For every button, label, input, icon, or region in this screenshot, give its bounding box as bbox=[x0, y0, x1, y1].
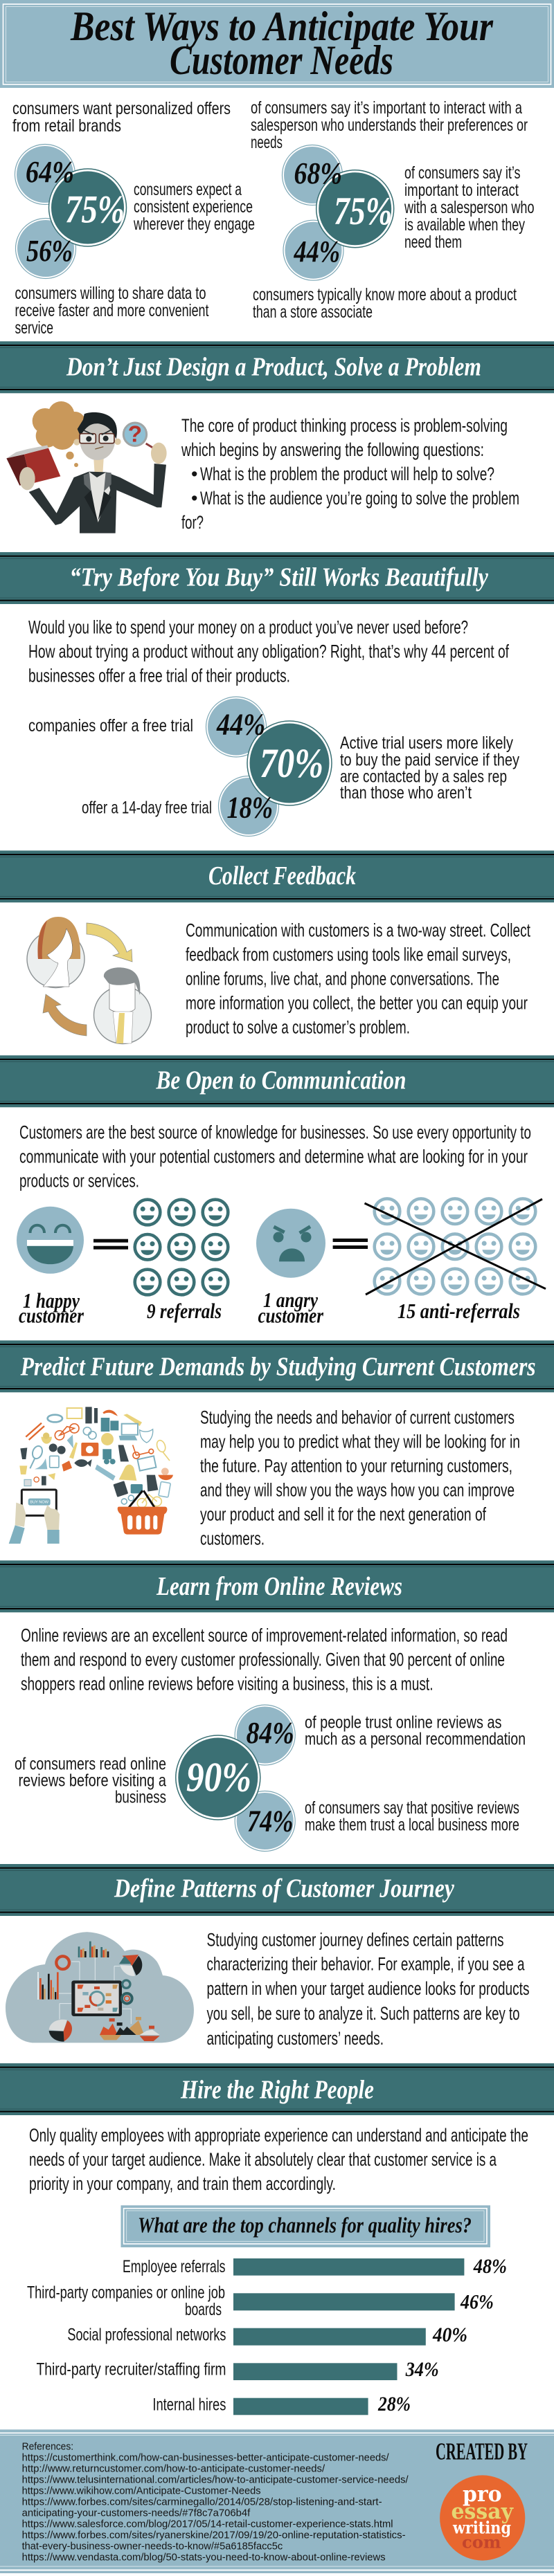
icon: happy customer face bbox=[17, 1207, 84, 1274]
caption: 56 percent bbox=[15, 284, 209, 338]
stat circle: 68 percent bbox=[283, 145, 342, 205]
section banner: online reviews: Learn from Online Reviews bbox=[156, 1572, 402, 1601]
figure: 84 percent: 84% bbox=[247, 1716, 294, 1750]
label: 1 happy customer bbox=[19, 1288, 84, 1328]
hands and sleeves bbox=[9, 1503, 60, 1544]
panel: retail statistics left bbox=[12, 99, 255, 338]
label: 15 anti-referrals: 15 anti-referrals bbox=[397, 1299, 520, 1323]
figure: 18 percent: 18% bbox=[227, 791, 273, 825]
references list: https://www.vendasta.com/blog/50-stats-you-need-to-know-about-online-reviews bbox=[22, 2552, 386, 2564]
glasses and face bbox=[80, 430, 114, 449]
bar: third-party companies 46 percent: 46% bbox=[460, 2291, 494, 2314]
text block: communication: products or services. bbox=[19, 1171, 139, 1191]
caption: 90 percent: reviews before visiting a bbox=[18, 1771, 166, 1791]
text block: free trial intro bbox=[28, 617, 509, 686]
ears bbox=[73, 439, 121, 446]
pie chart right bbox=[119, 1955, 142, 1976]
connector lines bbox=[59, 1957, 131, 2024]
figure: 75 percent: 75% bbox=[65, 188, 125, 232]
text block: product thinking: for? bbox=[181, 512, 204, 533]
logo: pro essay writing com: pro bbox=[463, 2482, 501, 2507]
caption: 70 percent: than those who aren’t bbox=[340, 783, 472, 803]
bar: third-party companies 46 percent bbox=[27, 2283, 494, 2319]
section banner: open to communication bbox=[0, 1055, 554, 1107]
caption: 75 percent: consistent experience bbox=[134, 197, 253, 217]
references list: https://www.forbes.com/sites/ryanerskine/2017/09/19/20-online-reputation-statistics- bbox=[22, 2530, 406, 2541]
text block: customer journey bbox=[206, 1929, 529, 2049]
bar: social networks 40 percent: Social professional networks bbox=[67, 2326, 226, 2345]
stat circle: 56 percent bbox=[15, 219, 76, 278]
caption: 68 percent bbox=[251, 98, 528, 152]
references list: https://customerthink.com/how-can-businesses-better-anticipate-customer-needs/ bbox=[22, 2452, 389, 2464]
caption: 70 percent: are contacted by a sales rep bbox=[340, 767, 507, 787]
right hand bbox=[151, 443, 167, 464]
bar: employee referrals 48 percent bbox=[123, 2255, 507, 2278]
stat circle: 75 percent bbox=[316, 170, 394, 248]
magnifier bbox=[123, 421, 153, 448]
icon: equals sign bbox=[93, 1239, 128, 1250]
section banner: customer journey: Define Patterns of Customer Journey bbox=[114, 1874, 454, 1903]
caption: 75 percent bbox=[404, 163, 535, 252]
stat circle: 84 percent bbox=[235, 1705, 295, 1765]
text block: customer journey: anticipating customers’ needs. bbox=[206, 2028, 384, 2049]
caption: 44 percent: than a store associate bbox=[253, 302, 373, 322]
bar: recruiter 34 percent bbox=[36, 2358, 439, 2381]
section banner: hire the right people: Hire the Right People bbox=[180, 2075, 374, 2104]
icon: angry customer face bbox=[256, 1209, 325, 1278]
label: 9 referrals: 9 referrals bbox=[147, 1299, 222, 1323]
text block: free trial intro: businesses offer a free trial of their products. bbox=[28, 666, 290, 686]
panel: retail statistics right bbox=[251, 98, 535, 322]
section banner: open to communication: Be Open to Communication bbox=[156, 1066, 406, 1095]
label: 1 happy customer: customer bbox=[19, 1304, 84, 1328]
caption: 84 percent bbox=[305, 1713, 526, 1749]
neck bbox=[93, 455, 104, 474]
icon: fifteen crossed-out smiley faces bbox=[364, 1198, 546, 1295]
donut chart bbox=[56, 1956, 69, 1969]
figure: 44 percent: 44% bbox=[294, 235, 340, 268]
section banner: collect feedback: Collect Feedback bbox=[208, 861, 356, 890]
figure: 64 percent: 64% bbox=[26, 155, 74, 189]
stat circle: 90 percent bbox=[176, 1735, 260, 1820]
arc of product icons bbox=[19, 1407, 173, 1508]
references list: https://www.forbes.com/sites/carminegallo/2014/05/28/stop-listening-and-start- bbox=[22, 2496, 382, 2508]
references list: anticipating-your-customers-needs/#7f8c7a706b4f bbox=[22, 2508, 251, 2519]
caption: 68 percent: needs bbox=[251, 133, 283, 152]
thought cloud bbox=[33, 401, 85, 467]
figure: 75 percent: 75% bbox=[334, 190, 392, 233]
orange arrow bbox=[43, 994, 87, 1036]
caption: 64 percent bbox=[12, 99, 231, 136]
stat circle: 70 percent bbox=[247, 721, 332, 805]
section banner: hire the right people bbox=[0, 2063, 554, 2115]
figure: 44 percent: 44% bbox=[216, 708, 265, 742]
label: 1 happy customer: 1 happy bbox=[23, 1288, 80, 1313]
bottom pie chart bbox=[49, 2020, 72, 2042]
caption: 75 percent: important to interact bbox=[404, 181, 519, 200]
section banner: solve a problem: Don’t Just Design a Product, Solve a Problem bbox=[66, 352, 481, 381]
section banner: customer journey bbox=[0, 1864, 554, 1916]
top bar chart bbox=[78, 1942, 109, 1957]
figure: 74 percent: 74% bbox=[247, 1805, 294, 1838]
figure: 70 percent: 70% bbox=[260, 740, 323, 786]
text block: hiring bbox=[29, 2125, 528, 2194]
book bbox=[6, 445, 60, 486]
label: 1 angry customer: customer bbox=[258, 1304, 324, 1328]
logo: pro essay writing com: writing bbox=[452, 2518, 511, 2538]
header banner bbox=[0, 0, 554, 88]
bar: recruiter 34 percent: 34% bbox=[405, 2358, 439, 2381]
title: Best Ways to Anticipate Your bbox=[70, 3, 494, 49]
caption: 90 percent bbox=[15, 1754, 166, 1807]
icon: analytics cloud with tablet and charts bbox=[6, 1932, 194, 2043]
text block: hiring: priority in your company, and train them accordingly. bbox=[29, 2173, 336, 2194]
text block: communication bbox=[19, 1122, 531, 1191]
references list: References: bbox=[22, 2441, 73, 2453]
references list: https://www.telusinternational.com/articles/how-to-anticipate-customer-service-needs/ bbox=[22, 2474, 409, 2486]
caption: 18 percent: offer a 14-day free trial bbox=[82, 798, 212, 818]
chart heading box bbox=[120, 2205, 490, 2247]
gears bbox=[122, 1980, 132, 2004]
section banner: collect feedback bbox=[0, 850, 554, 902]
title bbox=[70, 3, 494, 83]
section banner: online reviews bbox=[0, 1560, 554, 1612]
tablet with buy now button: BUY NOW bbox=[30, 1501, 49, 1505]
section banner: try before you buy: “Try Before You Buy” Still Works Beautifully bbox=[69, 563, 488, 592]
jacket bbox=[29, 464, 166, 533]
bar: internal hires 28 percent bbox=[152, 2393, 411, 2415]
caption: 56 percent: receive faster and more convenient bbox=[15, 301, 209, 320]
icon: nine referral smiley faces bbox=[135, 1200, 228, 1295]
woman bbox=[27, 917, 84, 988]
stat circle: 18 percent bbox=[219, 776, 278, 836]
panel: free trial statistics bbox=[28, 697, 519, 836]
icon: equals sign bbox=[333, 1239, 368, 1249]
yellow arrow bbox=[87, 923, 132, 962]
text block: predict demands bbox=[200, 1407, 520, 1549]
bar: employee referrals 48 percent: 48% bbox=[473, 2255, 507, 2278]
stat circle: 44 percent bbox=[206, 697, 266, 757]
figure: 68 percent: 68% bbox=[294, 156, 342, 190]
text block: collect feedback: product to solve a customer’s problem. bbox=[186, 1016, 410, 1037]
logo: pro essay writing com: com bbox=[462, 2532, 501, 2552]
text block: predict demands: customers. bbox=[200, 1528, 265, 1549]
references list: https://www.wikihow.com/Anticipate-Customer-Needs bbox=[22, 2485, 261, 2497]
shopping basket bbox=[118, 1490, 167, 1535]
bar: social networks 40 percent bbox=[67, 2323, 467, 2346]
mountain chart bbox=[100, 2017, 160, 2041]
logo: pro essay writing com bbox=[440, 2475, 525, 2561]
left bar chart bbox=[37, 1972, 59, 2000]
references list: https://www.salesforce.com/blog/2017/05/14-retail-customer-experience-stats.html bbox=[22, 2519, 393, 2530]
chart heading box: What are the top channels for quality hires? bbox=[138, 2213, 472, 2238]
references list: http://www.returncustomer.com/how-to-anticipate-customer-needs/ bbox=[22, 2463, 325, 2475]
figure: 56 percent: 56% bbox=[26, 234, 73, 268]
label: 1 angry customer: 1 angry bbox=[263, 1288, 318, 1312]
left hand bbox=[19, 467, 35, 490]
title: Customer Needs bbox=[170, 37, 393, 83]
label: 1 angry customer bbox=[258, 1288, 324, 1328]
stat circle: 75 percent bbox=[48, 169, 126, 246]
tablet bbox=[71, 1980, 122, 2016]
bar: social networks 40 percent: 40% bbox=[432, 2323, 467, 2346]
caption: 75 percent: wherever they engage bbox=[133, 214, 255, 234]
bar chart: top channels for quality hires bbox=[27, 2255, 507, 2415]
magnifier: ? bbox=[128, 421, 142, 447]
shirt and lapels bbox=[84, 472, 111, 522]
caption: 64 percent: from retail brands bbox=[12, 116, 121, 136]
caption: 56 percent: service bbox=[15, 318, 53, 338]
bar: employee referrals 48 percent: Employee referrals bbox=[123, 2257, 226, 2276]
caption: 74 percent bbox=[305, 1798, 519, 1835]
text block: product thinking: • bbox=[191, 464, 197, 484]
references list bbox=[22, 2441, 409, 2564]
icon: feedback exchange between woman and man bbox=[27, 917, 151, 1043]
caption: 90 percent: business bbox=[115, 1788, 166, 1807]
tablet with buy now button bbox=[21, 1490, 56, 1515]
stat circle: 44 percent bbox=[283, 220, 343, 280]
stat circle: 74 percent bbox=[235, 1791, 295, 1852]
man bbox=[94, 967, 151, 1043]
caption: 44 percent: companies offer a free trial bbox=[28, 716, 193, 736]
bar: internal hires 28 percent: 28% bbox=[377, 2393, 411, 2415]
footer panel bbox=[0, 2429, 554, 2573]
bar: internal hires 28 percent: Internal hires bbox=[152, 2395, 226, 2414]
text block: product thinking bbox=[181, 415, 519, 533]
icon: shopping items flowing from tablet to basket bbox=[9, 1407, 173, 1544]
logo: pro essay writing com: essay bbox=[452, 2499, 514, 2524]
text block: collect feedback bbox=[186, 920, 530, 1037]
section banner: try before you buy bbox=[0, 552, 554, 604]
section banner: solve a problem bbox=[0, 341, 554, 393]
head bbox=[80, 421, 115, 460]
panel: review statistics bbox=[15, 1705, 526, 1852]
cloud bbox=[6, 1932, 194, 2043]
caption: 75 percent: need them bbox=[404, 232, 462, 252]
caption: 70 percent bbox=[340, 733, 519, 803]
figure: 90 percent: 90% bbox=[186, 1754, 251, 1800]
bar: third-party companies 46 percent: Third-party companies or online job bbox=[27, 2283, 225, 2303]
caption: 44 percent bbox=[253, 285, 517, 322]
caption: 75 percent bbox=[133, 180, 255, 234]
references list: that-every-business-owner-needs-to-know/#5a6185facc5c bbox=[22, 2541, 283, 2552]
caption: 84 percent: of people trust online reviews as bbox=[305, 1713, 501, 1733]
hair bbox=[78, 412, 117, 439]
bar: recruiter 34 percent: Third-party recruiter/staffing firm bbox=[36, 2360, 226, 2379]
icon: thinking businessman with book and magnifier bbox=[6, 401, 167, 533]
caption: 64 percent: consumers want personalized offers bbox=[12, 99, 231, 118]
caption: 90 percent: of consumers read online bbox=[15, 1754, 166, 1773]
caption: 56 percent: consumers willing to share data to bbox=[15, 284, 206, 303]
text block: online reviews bbox=[21, 1625, 508, 1694]
bar: third-party companies 46 percent: boards bbox=[185, 2300, 222, 2319]
caption: 75 percent: consumers expect a bbox=[134, 180, 242, 199]
text block: product thinking: • bbox=[191, 488, 197, 509]
caption: 70 percent: Active trial users more likely bbox=[340, 733, 513, 753]
stat circle: 64 percent bbox=[15, 144, 75, 205]
section banner: predict future demands bbox=[0, 1340, 554, 1392]
